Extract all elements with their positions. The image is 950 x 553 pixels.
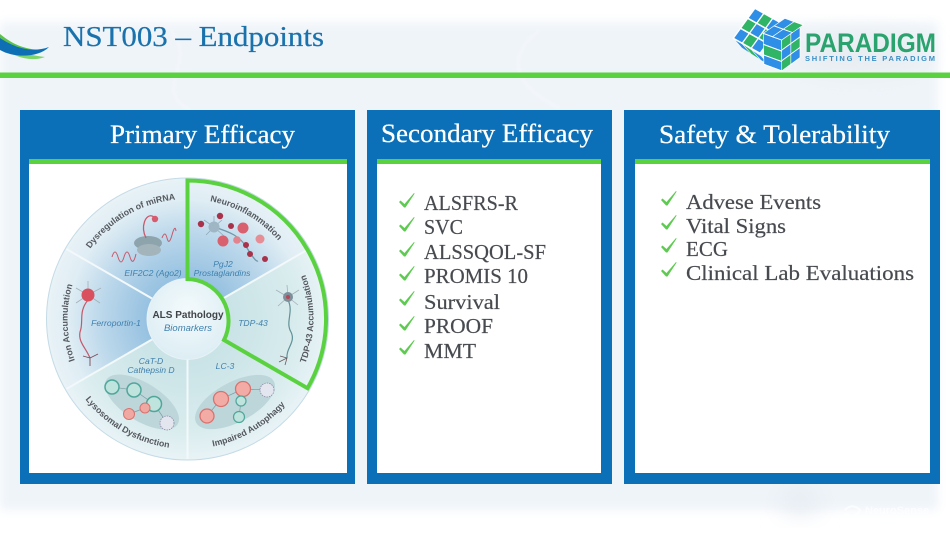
- checklist: safety endpoints: Clinical Lab Evaluations: [686, 261, 914, 285]
- icon: inflamed neuron and cells: [198, 213, 268, 262]
- curved label: TDP-43 accumulation: TDP-43 Accumulation: [300, 275, 314, 362]
- segment: iron accumulation: [48, 249, 152, 389]
- hub: ALS pathology biomarkers: [148, 279, 228, 359]
- tagline: SHIFTING THE PARADIGM: [805, 54, 935, 63]
- footer watermark: NeuroSense: [865, 505, 929, 517]
- icon: RNA and ribosome: [112, 216, 176, 262]
- biomarker labels: PgJ2: [213, 259, 233, 269]
- panel: safety and tolerability: [624, 110, 940, 484]
- company logo: [733, 8, 936, 71]
- biomarker labels: Ferroportin-1: [91, 318, 141, 328]
- diagram: ALS pathology wheel: [46, 178, 329, 460]
- icon: rubik cube: [733, 8, 803, 71]
- icon: iron neuron: [76, 281, 101, 366]
- curved label: impaired autophagy: Impaired Autophagy: [212, 402, 284, 446]
- checklist: secondary endpoints: ALSSQOL-SF: [424, 240, 546, 264]
- highlight outline: [188, 180, 326, 388]
- biomarker labels: [91, 259, 268, 375]
- segment: dysregulation of miRNA: [66, 179, 188, 298]
- curved label: iron accumulation: Iron Accumulation: [62, 284, 75, 362]
- biomarker labels: EIF2C2 (Ago2): [124, 268, 182, 278]
- curved label: lysosomal dysfunction: Lysosomal Dysfunction: [86, 396, 169, 448]
- checklist: secondary endpoints: ALSFRS-R: [424, 191, 518, 215]
- biomarker labels: Cathepsin D: [127, 365, 175, 375]
- biomarker labels: CaT-D: [139, 356, 163, 366]
- checklist: secondary endpoints: SVC: [424, 215, 463, 239]
- checklist: safety endpoints: Advese Events: [686, 190, 821, 214]
- icon: TDP-43 neuron: [276, 285, 299, 365]
- heading: safety and tolerability: Safety & Tolerability: [659, 120, 890, 149]
- checklist: secondary endpoints: PROMIS 10: [424, 264, 528, 288]
- segment: neuroinflammation: [188, 179, 309, 298]
- segment: TDP-43 accumulation: [223, 249, 327, 389]
- checklist: secondary endpoints: Survival: [424, 290, 500, 314]
- curved label: dysregulation of miRNA: Dysregulation of miRNA: [86, 194, 176, 248]
- checklist: safety endpoints: ECG: [686, 237, 728, 261]
- biomarker labels: LC-3: [216, 361, 235, 371]
- hub: ALS pathology biomarkers: Biomarkers: [164, 323, 212, 334]
- checklist: secondary endpoints: PROOF: [424, 314, 493, 338]
- header rule: [0, 72, 950, 78]
- segment: impaired autophagy: [188, 340, 309, 459]
- title: NST003 – Endpoints: [63, 21, 324, 53]
- icon: autophagy cells: [187, 364, 283, 440]
- checklist: safety endpoints: [661, 190, 914, 285]
- segment: lysosomal dysfunction: [66, 340, 188, 459]
- heading: secondary efficacy: Secondary Efficacy: [381, 119, 593, 148]
- panel: primary efficacy: [20, 110, 355, 484]
- panel: secondary efficacy: [367, 110, 612, 484]
- icon: lysosome cells: [96, 364, 188, 440]
- curved label: neuroinflammation: Neuroinflammation: [210, 195, 281, 240]
- checklist: secondary endpoints: MMT: [424, 339, 476, 363]
- checklist: secondary endpoints: [399, 191, 546, 363]
- biomarker labels: Prostaglandins: [194, 268, 251, 278]
- checklist: safety endpoints: Vital Signs: [686, 214, 786, 238]
- biomarker labels: TDP-43: [238, 318, 268, 328]
- hub: ALS pathology biomarkers: ALS Pathology: [152, 310, 224, 321]
- wordmark: PARADIGM: [805, 28, 936, 58]
- swoosh logo mark: [0, 34, 49, 59]
- heading: primary efficacy: Primary Efficacy: [110, 120, 295, 149]
